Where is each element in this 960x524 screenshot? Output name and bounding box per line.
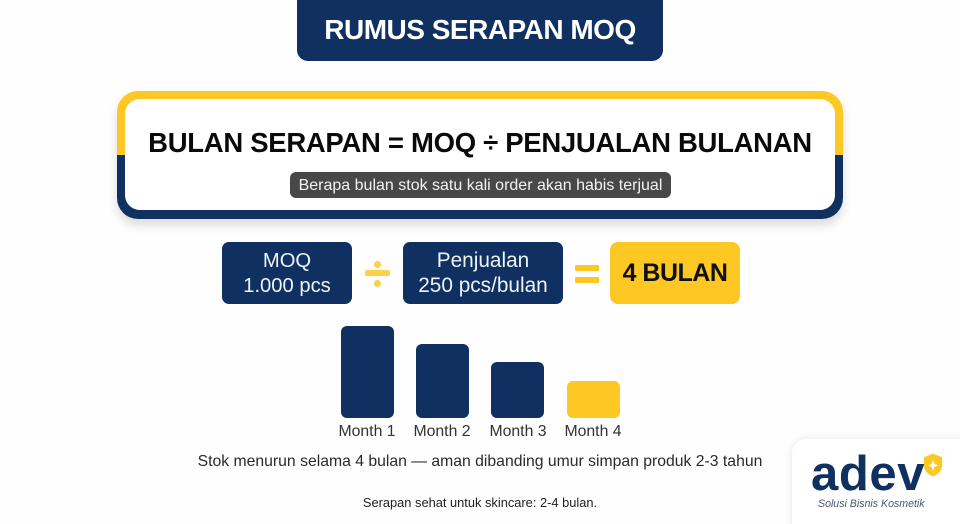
icon: shield: [924, 454, 942, 476]
box: MOQ: 1.000 pcs: [243, 275, 331, 297]
logo card: [792, 439, 960, 524]
icon: divide: [365, 261, 390, 287]
formula subtitle: [290, 172, 671, 198]
box: sales: 250 pcs/bulan: [418, 274, 548, 297]
box: MOQ: [222, 242, 352, 304]
label: month 2: Month 2: [413, 423, 471, 440]
bar: month 3: [491, 362, 544, 418]
panel: formula: [117, 91, 843, 219]
title banner: [297, 0, 663, 61]
box: sales: Penjualan: [437, 249, 529, 272]
panel inner: [125, 99, 835, 210]
box: result: [610, 242, 740, 304]
label: month 1: Month 1: [338, 423, 396, 440]
box: sales: [403, 242, 563, 304]
logo wordmark: adev: [811, 447, 925, 501]
box: MOQ: MOQ: [263, 250, 311, 272]
bar: month 4: [567, 381, 620, 418]
label: month 3: Month 3: [489, 423, 547, 440]
title text: RUMUS SERAPAN MOQ: [324, 14, 636, 45]
box: result: 4 BULAN: [623, 259, 727, 287]
icon: equals: [575, 265, 599, 283]
bar: month 1: [341, 326, 394, 418]
chart: stock decline: [338, 326, 622, 440]
caption: Stok menurun selama 4 bulan — aman dibanding umur simpan produk 2-3 tahun: [198, 453, 762, 470]
formula text: BULAN SERAPAN = MOQ ÷ PENJUALAN BULANAN: [148, 127, 812, 158]
formula subtitle: Berapa bulan stok satu kali order akan habis terjual: [299, 177, 662, 194]
footnote: Serapan sehat untuk skincare: 2-4 bulan.: [363, 495, 597, 510]
label: month 4: Month 4: [564, 423, 622, 440]
bar: month 2: [416, 344, 469, 418]
logo tagline: Solusi Bisnis Kosmetik: [818, 498, 925, 510]
